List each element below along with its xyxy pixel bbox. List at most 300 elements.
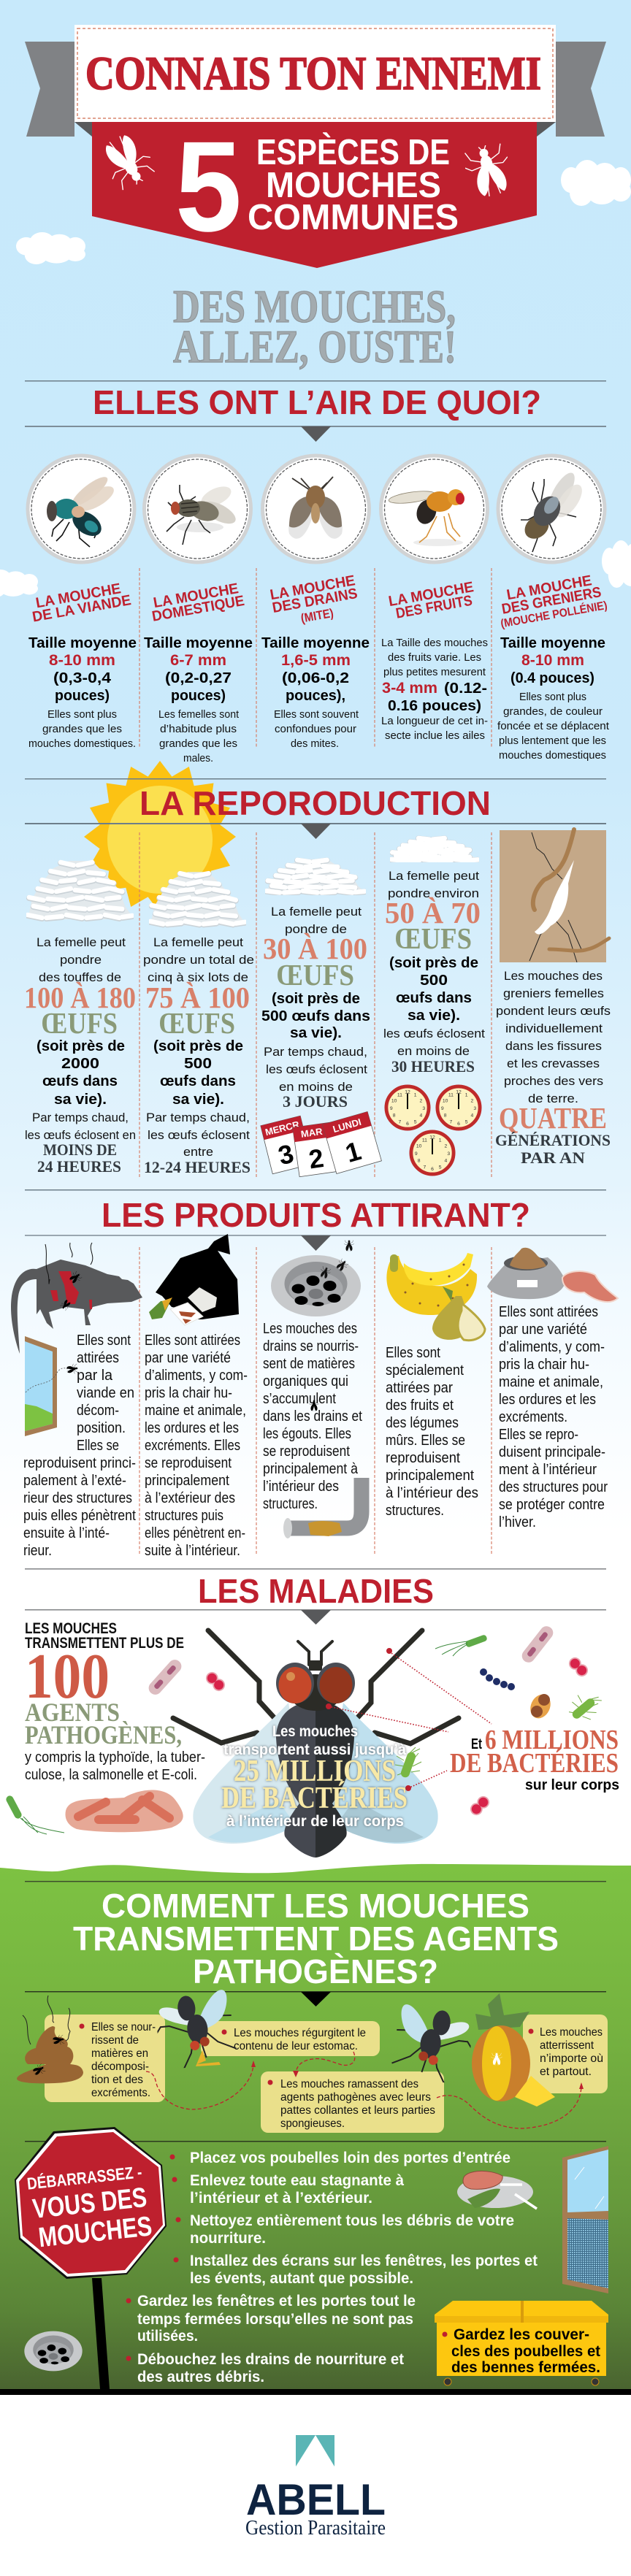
attractant text: column 5: Elles sont attirées	[499, 1304, 598, 1320]
attractant text: column 3: l’intérieur des	[263, 1479, 339, 1495]
attractant text: column 1	[23, 1333, 136, 1559]
portrait: fruit fly	[381, 456, 488, 562]
text: 100 agents pathogènes: y compris la typhoïde, la tuber-	[25, 1749, 205, 1766]
reproduction text: column 3: La femelle peut	[271, 905, 362, 919]
illustration: droppings	[17, 1996, 83, 2083]
name: cluster fly: DES GRENIERS	[500, 584, 603, 618]
species names	[28, 571, 608, 630]
icon: calendar pages	[261, 1112, 381, 1177]
subtitle: ESPÈCES DE	[256, 133, 450, 172]
name: cluster fly: (MOUCHE POLLÉNIE)	[500, 598, 608, 630]
illustration: bananas and pear	[386, 1253, 485, 1341]
attractant text: column 1: reproduisent princi-	[23, 1455, 136, 1471]
size facts: column 5: mouches domestiques	[499, 749, 606, 762]
reproduction text: column 3: (soit près de	[272, 991, 360, 1007]
reproduction text: column 1: 2000	[61, 1056, 99, 1072]
egg pile: column 1	[28, 861, 132, 919]
cloud: left behind species labels	[0, 570, 38, 597]
size facts: column 2: pouces)	[171, 688, 226, 704]
attractant text: column 2	[145, 1333, 248, 1559]
illustration: garbage bag	[149, 1234, 239, 1325]
icon: fly on text	[309, 1400, 319, 1411]
size facts: column 4: 0.16 pouces)	[388, 698, 481, 714]
slogan	[173, 280, 456, 372]
callout points	[326, 1648, 411, 1791]
illustration: stop sign: MOUCHES	[37, 2211, 153, 2253]
attractant text: column 5	[499, 1304, 608, 1530]
attractant text: column 2: se reproduisent	[145, 1455, 232, 1471]
size facts: column 2: Taille moyenne	[144, 635, 253, 651]
reproduction text: column 4: 500	[420, 973, 448, 989]
size facts: column 3: pouces),	[286, 688, 345, 704]
icon: bacteria colony	[66, 1790, 183, 1832]
illustration: stop sign	[15, 2127, 167, 2389]
section heading: reproduction: LA REPORODUCTION	[139, 784, 491, 822]
prevention list: utilisées.	[137, 2328, 198, 2345]
callout: regurgitation: contenu de leur estomac.	[234, 2040, 358, 2052]
size facts: column 4: secte inclue les ailes	[385, 729, 485, 742]
title banner	[25, 25, 606, 268]
text: 6 millions: sur leur corps	[525, 1777, 619, 1793]
reproduction text: column 2: pondre un total de	[143, 953, 254, 967]
reproduction text: column 4: œufs dans	[396, 990, 472, 1006]
attractant text: column 5: se protéger contre	[499, 1497, 605, 1513]
name: drain fly	[269, 572, 361, 630]
illustration: second fly	[390, 2004, 479, 2086]
illustration: eggs in soil crack	[500, 829, 609, 962]
reproduction text: column 5: et les crevasses	[507, 1057, 600, 1070]
attractant text: column 5: maine et animale,	[499, 1374, 603, 1390]
section heading: transmission: TRANSMETTENT DES AGENTS	[73, 1920, 559, 1958]
reproduction text: column 3: 500 œufs dans	[261, 1008, 370, 1024]
reproduction text: column 5: dans les fissures	[505, 1039, 602, 1053]
name: cluster fly	[494, 571, 608, 630]
text: 25 millions over fly	[221, 1723, 408, 1830]
icons: bacteria	[5, 1624, 604, 1834]
callout: pick up pathogens: agents pathogènes avec leurs	[280, 2091, 431, 2104]
reproduction text: column 1: 100 À 180	[24, 981, 136, 1014]
illustration: dumpster with message: cles des poubelles et	[451, 2343, 600, 2360]
cloud: left of banner	[16, 232, 85, 264]
reproduction text: column 4: les œufs éclosent	[383, 1027, 485, 1040]
attractant text: column 3: s’accumulent	[263, 1391, 336, 1407]
callout: landing: n’importe où	[540, 2052, 603, 2065]
attractant text: column 2: Elles sont attirées	[145, 1333, 240, 1349]
reproduction text: column 2: 12-24 HEURES	[144, 1158, 251, 1176]
reproduction text: column 3: Par temps chaud,	[264, 1045, 367, 1059]
attractant text: column 4: attirées par	[386, 1380, 453, 1396]
section heading: reproduction	[25, 778, 606, 839]
reproduction text: column 4: ŒUFS	[394, 921, 472, 955]
text: 25 millions over fly: 25 MILLIONS	[234, 1755, 396, 1788]
reproduction text: column 2: les œufs éclosent	[148, 1128, 250, 1142]
size facts: column 1: grandes que les	[42, 723, 122, 735]
attractant text: column 2: pris la chair hu-	[145, 1385, 232, 1401]
reproduction text: column 3: les œufs éclosent	[266, 1062, 367, 1076]
attractant text: column 4: spécialement	[386, 1362, 464, 1379]
text: 25 millions over fly: DE BACTÉRIES	[221, 1781, 408, 1815]
icon: sun	[84, 761, 236, 913]
attractant text: column 1: attirées	[77, 1350, 119, 1366]
reproduction text: column 2: La femelle peut	[153, 935, 243, 949]
illustration: dead rat	[11, 1243, 142, 1354]
attractant text: column 4: reproduisent	[386, 1450, 460, 1466]
logo: Abell: ABELL	[246, 2475, 386, 2524]
reproduction text: column 2: sa vie).	[172, 1092, 224, 1108]
size facts: column 5: Elles sont plus	[519, 691, 586, 703]
size facts: column 4: plus petites mesurent	[383, 666, 486, 678]
attractant text: column 4: à l’intérieur des	[386, 1485, 478, 1501]
reproduction text: column 2: 75 À 100	[145, 981, 250, 1014]
attractant text: column 3: les égouts. Elles	[263, 1426, 351, 1442]
size facts: column 1: Taille moyenne	[28, 635, 137, 651]
reproduction text: column 4: sa vie).	[408, 1008, 460, 1024]
name: blow fly: LA MOUCHE	[34, 580, 122, 611]
portrait: blow fly	[28, 456, 134, 562]
reproduction text: column 5: proches des vers	[504, 1074, 603, 1088]
attractant text: column 2: suite à l’intérieur.	[145, 1543, 240, 1559]
size facts: column 2: males.	[183, 752, 213, 764]
egg pile: column 3	[267, 859, 364, 894]
reproduction text: column 5: PAR AN	[521, 1149, 585, 1167]
reproduction text: column 1	[24, 935, 136, 1176]
attractant text: column 2: principalement	[145, 1473, 229, 1489]
section heading: attractants: LES PRODUITS ATTIRANT?	[102, 1196, 530, 1234]
reproduction text: column 1: Par temps chaud,	[32, 1111, 129, 1124]
attractant text: column 5: ment à l’intérieur	[499, 1462, 597, 1478]
illustration: large fly	[173, 1630, 459, 1858]
reproduction text: column 5: individuellement	[505, 1021, 603, 1035]
dashed arrows: transmission cycle	[146, 2052, 581, 2128]
attractant text: column 3: dans les drains et	[263, 1408, 362, 1425]
prevention list: des autres débris.	[137, 2369, 264, 2385]
subtitle: COMMUNES	[248, 198, 459, 237]
illustration: drain	[271, 1240, 361, 1316]
size facts: column 1: Elles sont plus	[47, 708, 117, 721]
size facts: column 3: 1,6-5 mm	[281, 652, 351, 669]
section heading: transmission: PATHOGÈNES?	[193, 1952, 438, 1990]
section heading: appearance: ELLES ONT L’AIR DE QUOI?	[93, 383, 541, 421]
text: 100 agents pathogènes: culose, la salmonelle et E-coli.	[25, 1767, 197, 1783]
illustration: dog bowl and meat	[487, 1248, 618, 1302]
ribbon folds	[74, 122, 556, 137]
logo: Abell: Gestion Parasitaire	[245, 2517, 386, 2539]
reproduction text: column 5: GÉNÉRATIONS	[495, 1131, 611, 1149]
attractant text: column 1: viande en	[77, 1385, 134, 1401]
prevention list: Gardez les fenêtres et les portes tout le	[137, 2293, 416, 2309]
attractant text: column 3: sent de matières	[263, 1356, 355, 1372]
illustration: clogged pipe	[283, 1478, 362, 1538]
column dividers: appearance	[139, 568, 492, 748]
attractant text: column 1: palement à l’exté-	[23, 1473, 126, 1489]
text: 100 agents pathogènes: TRANSMETTENT PLUS DE	[25, 1635, 184, 1652]
text: 100 agents pathogènes: PATHOGÈNES,	[25, 1720, 182, 1749]
reproduction text: column 4: La femelle peut	[389, 869, 479, 883]
size facts: column 5: plus lentement que les	[499, 735, 606, 747]
attractant text: column 5: Elles se repro-	[499, 1427, 578, 1443]
icon: small drain	[24, 2331, 83, 2371]
icon: calendar pages: 3	[275, 1138, 297, 1170]
icon: white fly right	[461, 140, 516, 201]
slogan: DES MOUCHES,	[173, 280, 456, 332]
prevention list: temps fermées lorsqu’elles ne sont pas	[137, 2311, 413, 2328]
portrait: drain fly	[263, 456, 370, 562]
illustration: pineapple	[472, 1993, 555, 2107]
section heading: diseases: LES MALADIES	[198, 1572, 434, 1610]
reproduction text: column 1: pondre	[60, 953, 102, 967]
text: 25 millions over fly: Les mouches	[272, 1723, 358, 1740]
attractant text: column 3: structures.	[263, 1496, 318, 1512]
reproduction text: column 1: MOINS DE	[43, 1141, 117, 1159]
reproduction text: column 3: 30 À 100	[263, 932, 367, 965]
reproduction text: column 1: sa vie).	[54, 1092, 107, 1108]
size facts: column 3: des mites.	[291, 737, 339, 750]
name: drain fly: LA MOUCHE	[269, 572, 356, 603]
callout: pick up pathogens: spongieuses.	[280, 2117, 345, 2130]
attractant text: column 4: structures.	[386, 1503, 444, 1519]
illustration: window with screen	[562, 2146, 608, 2293]
callout: feeding: décomposi-	[91, 2061, 149, 2073]
attractant text: column 3: Les mouches des	[263, 1321, 357, 1337]
attractant text: column 5: les ordures et les	[499, 1392, 596, 1408]
attractant text: column 5: excréments.	[499, 1409, 567, 1425]
attractant text: column 2: maine et animale,	[145, 1403, 246, 1419]
icon: clocks	[386, 1086, 480, 1174]
reproduction text: column 2: œufs dans	[160, 1073, 236, 1089]
callout: feeding	[45, 2015, 165, 2102]
size facts: column 5: (0.4 pouces)	[510, 670, 594, 686]
attractant text: column 2: structures puis	[145, 1508, 223, 1524]
size facts: column 5: Taille moyenne	[500, 635, 605, 651]
reproduction text: column 5	[495, 969, 611, 1167]
size facts: column 1: pouces)	[55, 688, 110, 704]
size facts: column 3: (0,06-0,2	[282, 670, 349, 686]
reproduction text: column 1: (soit près de	[37, 1038, 125, 1054]
text: 100 agents pathogènes	[25, 1620, 205, 1783]
attractant text: column 1: Elles se	[77, 1438, 119, 1454]
icon: calendar pages: MERCR	[264, 1119, 301, 1138]
reproduction text: column 3: sa vie).	[290, 1025, 342, 1041]
size facts: column 1: mouches domestiques.	[28, 737, 136, 750]
text: 25 millions over fly: à l’intérieur de leur corps	[226, 1813, 404, 1830]
size facts: column 3: Elles sont souvent	[274, 708, 359, 721]
callout: pick up pathogens	[261, 2071, 444, 2133]
section heading: transmission	[25, 1881, 606, 2006]
size facts: column 2: 6-7 mm	[170, 652, 226, 669]
logo: Abell	[245, 2435, 386, 2539]
illustration: plate of scraps	[457, 2171, 537, 2209]
reproduction text: column 2: 500	[184, 1056, 212, 1072]
size facts: column 4: La longueur de cet in-	[381, 715, 488, 727]
illustration: window with fly	[25, 1336, 79, 1436]
name: house fly	[148, 580, 245, 625]
prevention list: les évents, autant que possible.	[190, 2270, 413, 2287]
reproduction text: column 4	[383, 869, 485, 1076]
name: drain fly: DES DRAINS	[271, 586, 359, 616]
egg pile: column 4	[391, 837, 478, 861]
section heading: diseases	[25, 1568, 606, 1625]
title text: CONNAIS TON ENNEMI	[85, 47, 541, 100]
size facts: column 1: (0,3-0,4	[53, 670, 112, 686]
green field background	[0, 1864, 631, 2395]
size facts: column 5: 8-10 mm	[521, 652, 584, 669]
attractant text: column 4: mûrs. Elles se	[386, 1433, 465, 1449]
attractant text: column 5: par une variété	[499, 1322, 587, 1338]
name: drain fly: (MITE)	[299, 606, 334, 626]
reproduction text: column 1: les œufs éclosent en	[25, 1128, 136, 1142]
attractant text: column 3: organiques qui	[263, 1373, 348, 1389]
size facts: column 4: La Taille des mouches	[381, 637, 488, 649]
attractant text: column 2: elles pénètrent en-	[145, 1525, 245, 1541]
illustration: stop sign: VOUS DES	[31, 2182, 148, 2225]
name: fruit fly: DES FRUITS	[394, 593, 473, 622]
reproduction text: column 4: (soit près de	[389, 955, 478, 971]
attractant text: column 5: l’hiver.	[499, 1514, 536, 1530]
illustration: stop sign: DÉBARRASSEZ -	[26, 2161, 142, 2193]
attractant text: column 1: par la	[77, 1368, 113, 1384]
size facts: column 5: foncée et se déplacent	[497, 720, 610, 732]
reproduction text: column 3: 3 JOURS	[283, 1092, 348, 1111]
reproduction text: column 2: cinq à six lots de	[148, 970, 248, 984]
attractant text: column 1: Elles sont	[77, 1333, 131, 1349]
reproduction text: column 2: ŒUFS	[158, 1006, 235, 1040]
prevention list: Enlevez toute eau stagnante à	[190, 2172, 404, 2189]
subtitle: MOUCHES	[266, 166, 441, 205]
prevention list: Installez des écrans sur les fenêtres, les portes et	[190, 2253, 538, 2269]
callout: landing: atterrissent	[540, 2039, 594, 2052]
species portraits	[28, 456, 605, 562]
size facts: column 4: 3-4 mm	[382, 680, 437, 697]
callout: pick up pathogens: Les mouches ramassent des	[280, 2078, 418, 2090]
reproduction text: column 2: Par temps chaud,	[146, 1111, 250, 1124]
size facts: column 1	[28, 635, 137, 750]
prevention list: nourriture.	[190, 2230, 266, 2247]
prevention list: l’intérieur et à l’extérieur.	[190, 2190, 372, 2207]
name: fruit fly: LA MOUCHE	[387, 579, 475, 610]
size facts: column 1: 8-10 mm	[49, 652, 115, 669]
attractant text: column 2: à l’extérieur des	[145, 1490, 235, 1506]
reproduction text: column 5: Les mouches des	[504, 969, 603, 983]
attractant text: column 4: principalement	[386, 1468, 474, 1484]
attractant text: column 3: principalement à	[263, 1461, 359, 1477]
reproduction text: column 2: (soit près de	[153, 1038, 243, 1054]
name: house fly: LA MOUCHE	[152, 580, 240, 611]
section heading: transmission: COMMENT LES MOUCHES	[102, 1887, 529, 1925]
size facts: column 3: Taille moyenne	[261, 635, 370, 651]
size facts: column 3	[261, 635, 370, 750]
big number 5: 5	[175, 115, 242, 258]
white footer	[0, 2395, 631, 2576]
reproduction text: column 1: La femelle peut	[37, 935, 126, 949]
icon: calendar pages: 2	[307, 1143, 326, 1174]
text: 6 millions: Et	[471, 1736, 482, 1752]
attractant text: column 5: d’aliments, y com-	[499, 1339, 605, 1355]
portrait: house fly	[145, 456, 251, 562]
icon: calendar pages: 1	[342, 1135, 364, 1168]
arrowheads	[251, 2061, 584, 2089]
illustration: fly regurgitating	[149, 1989, 238, 2071]
size facts: column 4: (0.12-	[444, 681, 487, 697]
section heading: appearance	[25, 380, 606, 442]
reproduction text: column 1: 24 HEURES	[37, 1157, 121, 1176]
callout: landing	[523, 2015, 608, 2093]
white title plate	[74, 25, 556, 122]
icon: calendar pages: MAR	[300, 1126, 324, 1140]
size facts: column 2: Les femelles sont	[158, 708, 240, 721]
size facts: column 4	[381, 637, 488, 742]
name: cluster fly: LA MOUCHE	[505, 572, 593, 603]
reproduction text: column 3: pondre de	[285, 922, 347, 936]
attractant text: column 4	[386, 1345, 478, 1519]
reproduction text: column 2: entre	[183, 1145, 213, 1159]
icon: calendar pages: LUNDI	[332, 1116, 362, 1135]
attractant text: column 1: position.	[77, 1420, 126, 1436]
callout: feeding: excréments.	[91, 2087, 150, 2099]
callout: feeding: matières en	[91, 2047, 148, 2060]
callout: landing: et partout.	[540, 2066, 592, 2078]
callout: landing: Les mouches	[540, 2026, 603, 2039]
column dividers: attractants	[139, 1247, 492, 1555]
reproduction text: column 4: en moins de	[397, 1044, 470, 1058]
size facts: column 3: confondues pour	[275, 723, 356, 735]
reproduction text: column 4: 50 À 70	[385, 896, 481, 929]
reproduction text: column 4: 30 HEURES	[391, 1057, 475, 1076]
cloud: right beside flies	[602, 540, 631, 588]
text: 100 agents pathogènes: 100	[25, 1641, 110, 1712]
name: house fly: DOMESTIQUE	[150, 593, 245, 625]
attractant text: column 2: les ordures et les	[145, 1420, 239, 1436]
callout: feeding: tion et des	[91, 2074, 143, 2086]
reproduction text: column 5: QUATRE	[499, 1101, 607, 1135]
text: 25 millions over fly: transportent aussi jusqu’à	[223, 1741, 406, 1758]
attractant text: column 1: ensuite à l’inté-	[23, 1525, 110, 1541]
callout: pick up pathogens: pattes collantes et leurs parties	[280, 2104, 435, 2117]
reproduction text: column 4: pondre environ	[388, 886, 479, 900]
attractant text: column 1: rieur des structures	[23, 1490, 132, 1506]
attractant text: column 3	[263, 1321, 362, 1512]
portrait: cluster fly	[498, 456, 605, 562]
name: blow fly: DE LA VIANDE	[31, 592, 132, 626]
cloud: right of banner	[561, 160, 631, 206]
callout: regurgitation: Les mouches régurgitent le	[234, 2027, 366, 2039]
attractant text: column 5: pris la chair hu-	[499, 1357, 589, 1373]
attractant text: column 2: excréments. Elles	[145, 1438, 240, 1454]
red dotted leader lines	[329, 1652, 492, 1788]
icon: white fly left	[96, 129, 158, 193]
attractant text: column 4: des légumes	[386, 1415, 459, 1431]
size facts: column 2: grandes que les	[159, 737, 237, 750]
attractant text: column 5: duisent principale-	[499, 1444, 605, 1460]
prevention list: Placez vos poubelles loin des portes d’entrée	[190, 2150, 510, 2166]
attractant text: column 2: par une variété	[145, 1350, 231, 1366]
illustration: dumpster with message	[435, 2301, 608, 2385]
text: 6 millions	[450, 1725, 619, 1793]
grey ribbon	[25, 42, 606, 137]
sky background	[0, 0, 631, 1898]
egg pile: column 2	[150, 872, 245, 925]
attractant text: column 3: se reproduisent	[263, 1444, 350, 1460]
reproduction text: column 3: en moins de	[279, 1080, 353, 1094]
divider: prevention	[25, 2141, 606, 2142]
prevention list	[126, 2150, 538, 2385]
illustration: dumpster with message: Gardez les couver-	[454, 2326, 589, 2343]
ground bar	[0, 2389, 631, 2395]
size facts: column 5: grandes, de couleur	[503, 705, 603, 718]
reproduction text: column 3	[261, 905, 370, 1111]
red chevron banner	[92, 122, 537, 268]
reproduction text: column 1: ŒUFS	[41, 1006, 118, 1040]
column dividers: reproduction	[139, 832, 492, 1177]
